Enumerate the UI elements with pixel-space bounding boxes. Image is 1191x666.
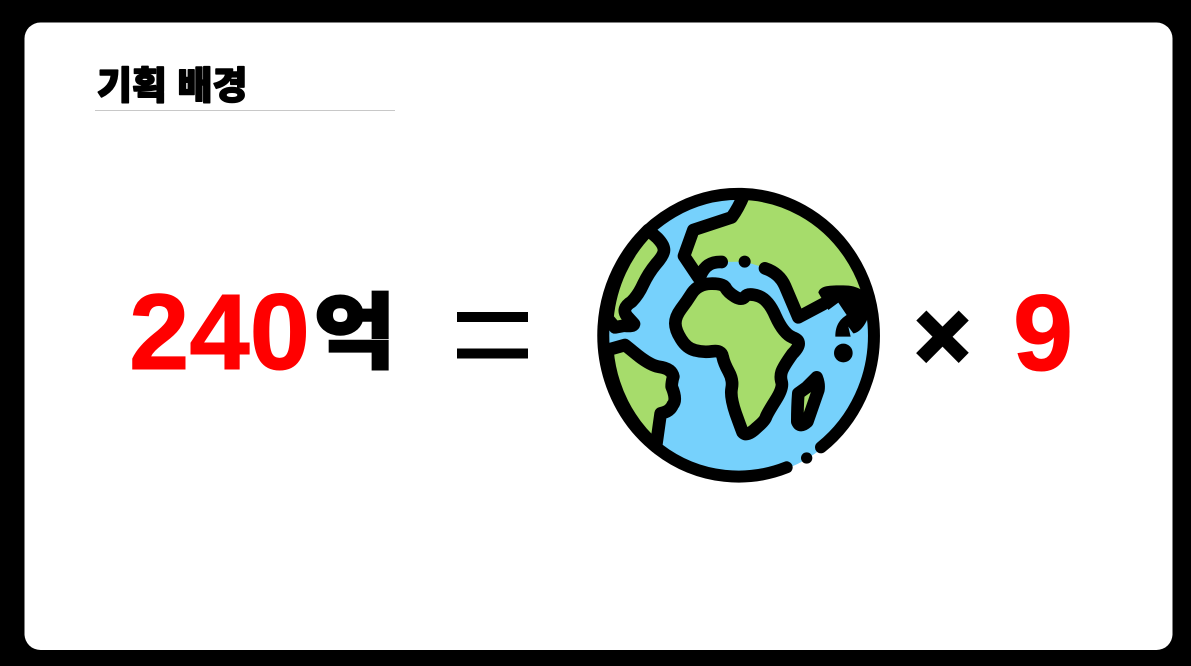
ocean <box>602 192 876 478</box>
land: south-west <box>607 345 675 447</box>
title underline <box>95 110 395 111</box>
island <box>797 377 819 425</box>
equation left: 240억: 억 <box>314 288 395 379</box>
land: north-west <box>607 230 664 327</box>
icon: earth globe <box>602 192 876 478</box>
land: eurasia <box>684 194 869 317</box>
multiplier: 9: 9 <box>1013 272 1073 393</box>
coastlines <box>684 195 744 277</box>
dark peninsula <box>818 285 871 337</box>
globe outline <box>603 194 874 477</box>
multiply sign: × <box>915 283 970 388</box>
title: 기획 배경 <box>97 66 247 108</box>
land: africa <box>675 284 799 434</box>
equals sign <box>457 312 528 358</box>
equation left: 240억 <box>129 271 395 392</box>
equation left: 240억: 240 <box>129 271 310 392</box>
